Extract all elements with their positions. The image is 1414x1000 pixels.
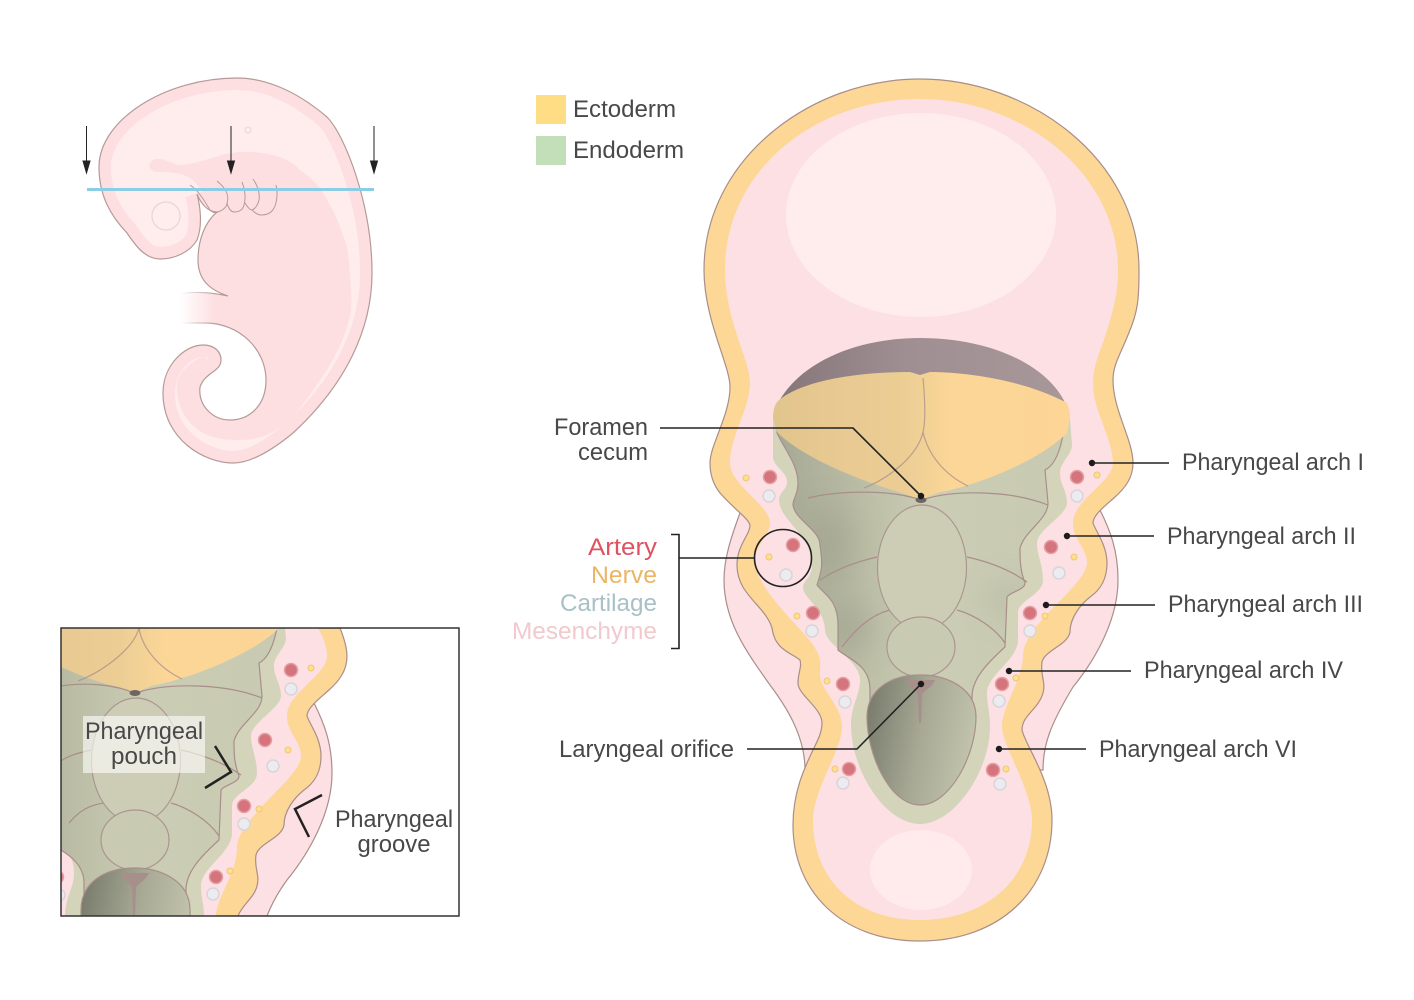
small oval [887,617,955,677]
lumen shading [816,517,870,650]
label: laryngeal orifice: Laryngeal orifice [559,736,734,763]
arch line 2 [820,557,1027,582]
foramen cecum pit [916,497,926,503]
inset frame [61,628,459,916]
vessels right [993,470,1100,707]
arrow right [370,126,378,173]
embryo tinted regions [99,78,372,463]
main cross-section [704,79,1139,941]
label: pharyngeal arch I: Pharyngeal arch I [1182,449,1364,476]
embryo outline [99,78,372,463]
nerve label: Nerve [591,562,657,589]
label: pharyngeal arch VI: Pharyngeal arch VI [1099,736,1297,763]
pouch chevron [205,746,231,788]
vessels left [743,470,856,789]
inset magnified section [50,628,347,916]
label: pharyngeal arch III: Pharyngeal arch III [1168,591,1363,618]
pharyngeal arch bumps [190,179,277,215]
cartilage label: Cartilage [560,590,657,617]
endoderm swatch [536,136,566,165]
ear [245,127,251,133]
groove chevron [295,795,322,837]
label: foramen cecum [554,414,924,499]
arch line 3 [842,610,1005,647]
section line [87,188,374,191]
ectoderm swatch [536,95,566,124]
pouch label backing [83,716,205,773]
pouch label: Pharyngeal [85,718,203,745]
pale lower ellipse [870,830,972,910]
embryo body [99,78,372,463]
arch line 1 [808,492,1048,505]
artery label: Artery [588,534,657,561]
bracket [671,534,754,648]
pouch label [85,718,203,770]
eye [152,202,180,230]
epiglottis [907,680,935,723]
endoderm label: Endoderm [573,137,684,164]
label: pharyngeal arch II: Pharyngeal arch II [1167,523,1356,550]
mesenchyme interior [725,99,1118,920]
ectoderm layer [704,79,1139,941]
label: pharyngeal arch VI [996,736,1297,763]
endoderm layer [773,418,1072,824]
label: pharyngeal arch I [1089,449,1364,476]
median oval [878,505,966,630]
tissue key [512,530,812,648]
label: laryngeal orifice [559,681,924,763]
laryngeal teardrop [867,675,976,805]
zoom circle [754,530,812,586]
tongue [773,372,1070,500]
pale upper ellipse [786,113,1056,317]
label: pharyngeal arch III [1043,591,1363,618]
limb fade [165,291,215,326]
mesenchyme lateral [724,510,1118,770]
label: pharyngeal arch II [1064,523,1356,550]
mesenchyme label: Mesenchyme [512,618,657,645]
groove label [335,806,453,858]
ectoderm label: Ectoderm [573,96,676,123]
pouch label: pouch [111,743,177,770]
pharynx lumen [777,420,1065,740]
label: pharyngeal arch IV [1006,657,1343,684]
label: foramen cecum: cecum [578,439,648,466]
legend [536,95,684,165]
maroon dome [777,338,1067,430]
embryo side view [99,78,372,463]
groove label: Pharyngeal [335,806,453,833]
label: pharyngeal arch IV: Pharyngeal arch IV [1144,657,1343,684]
groove label: groove [358,831,430,858]
arrow left [83,126,90,173]
label: foramen cecum: Foramen [554,414,648,441]
arrow middle [228,126,234,173]
inset panel [50,628,459,916]
tongue median line [864,378,968,488]
